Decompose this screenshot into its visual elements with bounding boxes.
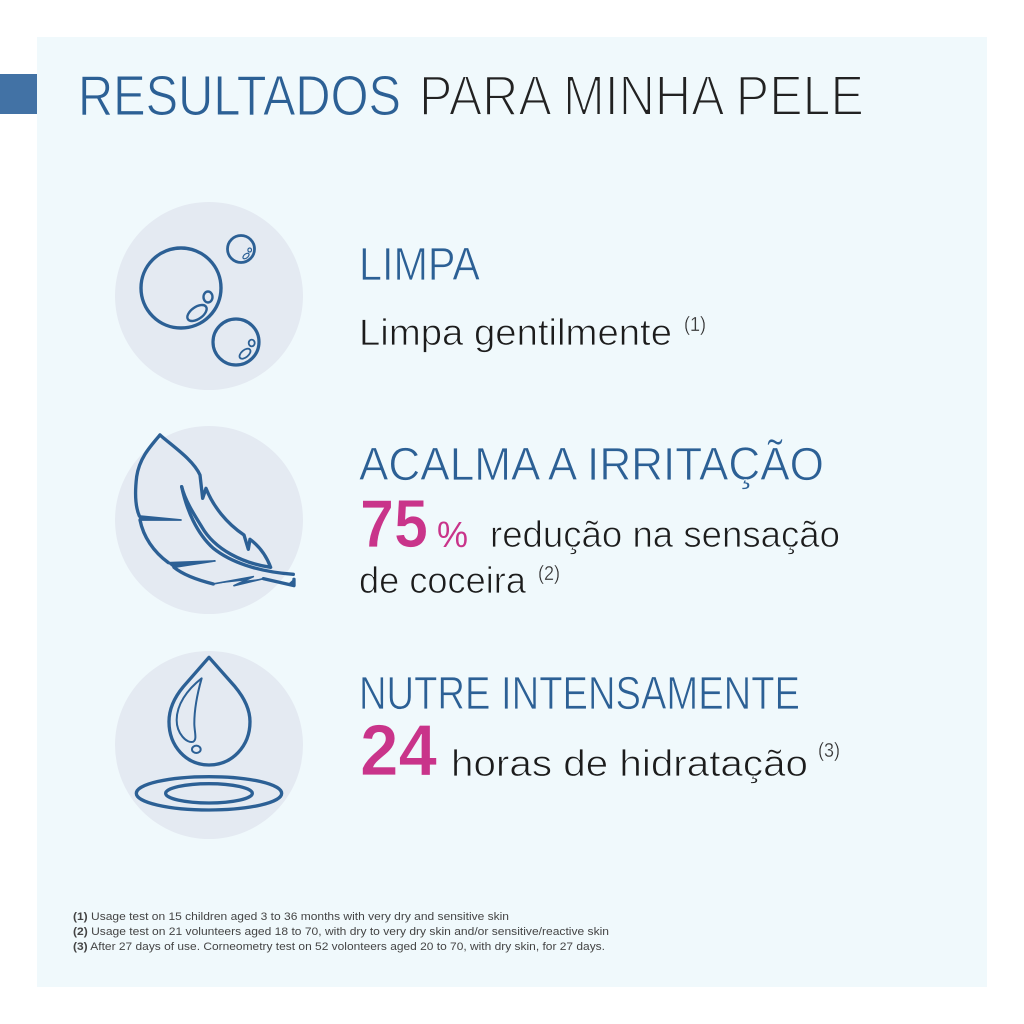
- footnote mark 1: (1): [684, 314, 706, 336]
- percent sign: %: [437, 514, 468, 555]
- footnotes: (3) After 27 days of use. Corneometry test on 52 volonteers aged 20 to 70, with dry skin, for 27 days.: [73, 941, 605, 953]
- title: light part: PARA MINHA PELE: [419, 64, 864, 128]
- section: limpa: [359, 238, 706, 353]
- text: de coceira: de coceira: [359, 560, 526, 601]
- icon: bubbles: [115, 202, 303, 390]
- text: limpa gentilmente: Limpa gentilmente: [359, 312, 672, 353]
- heading: nutre intensamente: NUTRE INTENSAMENTE: [359, 667, 800, 719]
- icon: feather: [115, 426, 303, 614]
- text: reducao na sensacao: redução na sensação: [490, 514, 840, 555]
- footnote mark 2: (2): [538, 563, 560, 585]
- section: nutre: [359, 667, 840, 791]
- icon: water drop: [115, 651, 303, 839]
- accent square: [0, 74, 37, 114]
- section: acalma: [359, 438, 840, 601]
- text: horas de hidratacao: horas de hidratação: [451, 743, 808, 784]
- footnotes: [73, 911, 609, 953]
- footnotes: (1) Usage test on 15 children aged 3 to 36 months with very dry and sensitive skin: [73, 911, 509, 923]
- number: 24: 24: [360, 711, 437, 791]
- footnote mark 3: (3): [818, 740, 840, 762]
- heading: limpa: LIMPA: [359, 238, 480, 290]
- title: [78, 64, 864, 128]
- heading: acalma a irritacao: ACALMA A IRRITAÇÃO: [359, 438, 824, 490]
- footnotes: (2) Usage test on 21 volunteers aged 18 to 70, with dry to very dry skin and/or sensitive/reactive skin: [73, 926, 609, 938]
- number: 75: 75: [360, 486, 428, 562]
- title: bold part: RESULTADOS: [78, 64, 401, 128]
